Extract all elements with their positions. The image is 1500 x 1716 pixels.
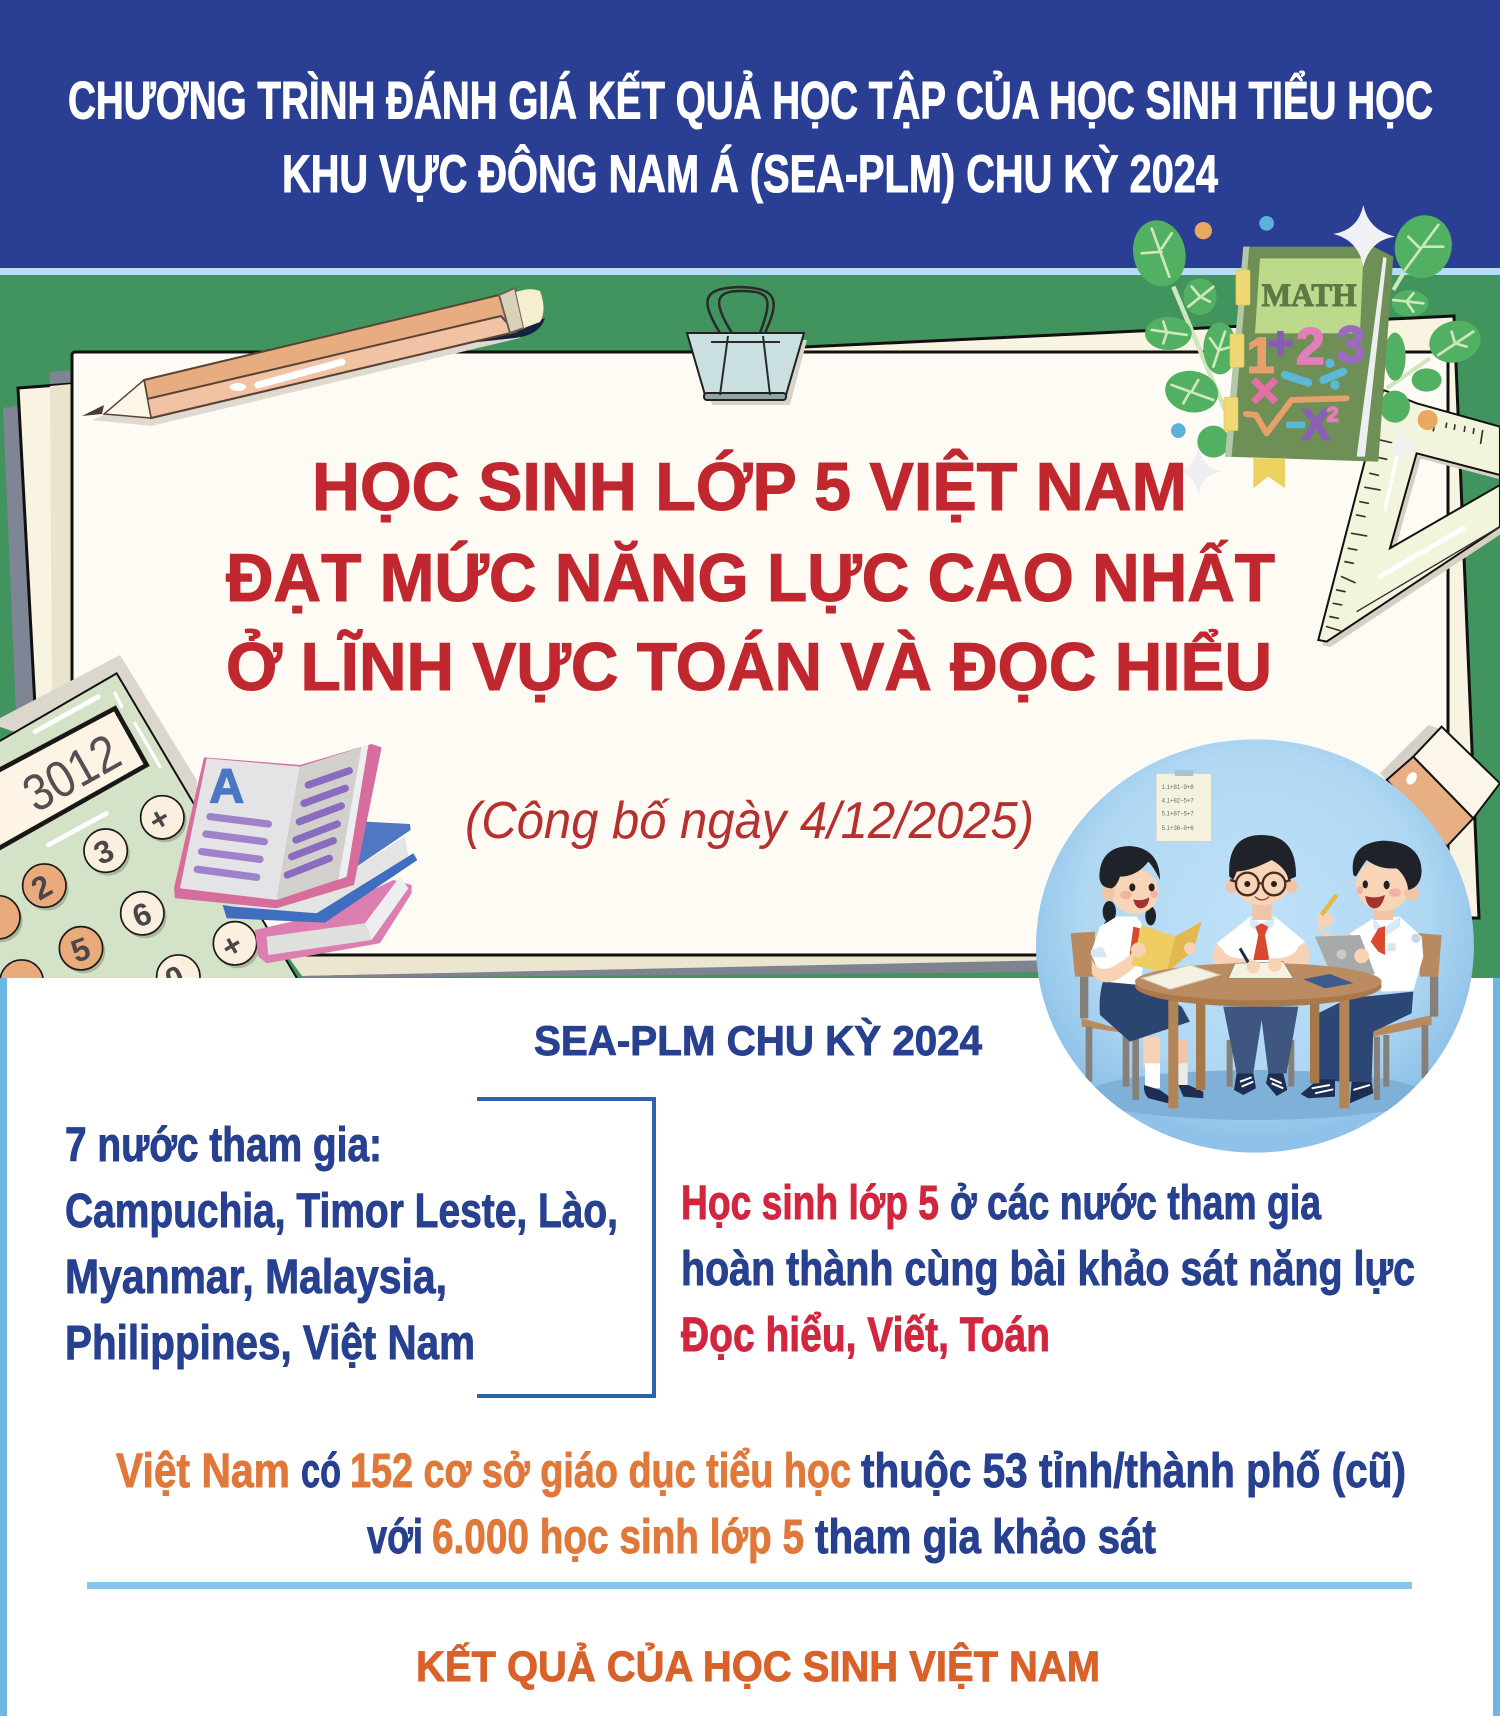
leaves — [1127, 209, 1485, 458]
survey description: Đọc hiểu, Viết, Toán — [681, 1309, 1050, 1362]
icon: math book with leaves — [1127, 205, 1485, 495]
wall poster: 5.1+87−5+7 — [1162, 812, 1194, 818]
Vietnam participation summary: Việt Nam — [116, 1445, 290, 1498]
book numerals: + — [1267, 317, 1294, 368]
books and calculator on table — [1142, 958, 1353, 989]
icon: open book — [174, 744, 382, 908]
section heading: SEA-PLM: SEA-PLM CHU KỲ 2024 — [534, 1017, 983, 1064]
book cover — [1225, 247, 1393, 462]
icon: calculator: 5 — [66, 930, 95, 970]
book label: MATH — [1262, 278, 1357, 314]
book numerals: X — [1302, 401, 1331, 449]
wall poster: 1.1+81−9+8 — [1162, 785, 1194, 791]
Vietnam participation summary: 6.000 học sinh lớp 5 — [432, 1511, 804, 1564]
title — [68, 70, 1433, 204]
main heading: Ở LĨNH VỰC TOÁN VÀ ĐỌC HIỂU — [226, 628, 1272, 705]
book numerals: 2 — [1296, 317, 1325, 375]
back paper sheets — [3, 316, 1479, 978]
section heading: results: KẾT QUẢ CỦA HỌC SINH VIỆT NAM — [416, 1642, 1100, 1691]
Vietnam participation summary: với — [367, 1511, 423, 1564]
Vietnam participation summary: thuộc 53 tỉnh/thành phố (cũ) — [861, 1445, 1406, 1498]
icon: calculator: 3 — [88, 832, 119, 872]
icon: pencil — [82, 288, 545, 426]
Vietnam participation summary: 152 cơ sở giáo dục tiểu học — [350, 1445, 851, 1498]
icon: eraser — [1380, 725, 1500, 847]
right boy — [1301, 841, 1423, 1103]
title: KHU VỰC ĐÔNG NAM Á (SEA-PLM) CHU KỲ 2024 — [282, 143, 1218, 204]
illustration: students around a table — [1036, 739, 1474, 1153]
main heading — [226, 448, 1275, 705]
round table — [1135, 963, 1382, 1108]
icon: calculator: 6 — [127, 895, 156, 935]
survey description: Học sinh lớp 5 — [681, 1177, 939, 1230]
book numerals: 2 — [1327, 402, 1339, 427]
book numerals: 3 — [1337, 316, 1365, 374]
participating countries list: 7 nước tham gia: — [65, 1119, 382, 1172]
icon: stack of books — [223, 822, 417, 963]
icon: binder clip — [687, 287, 807, 405]
survey description: ở các nước tham gia — [950, 1177, 1321, 1230]
Vietnam participation summary — [116, 1445, 1406, 1564]
wall poster: 5.1+36−9+6 — [1162, 826, 1194, 832]
header band — [0, 0, 1500, 275]
participating countries list: Campuchia, Timor Leste, Lào, — [65, 1185, 618, 1238]
icon: calculator: + — [215, 925, 249, 966]
Vietnam participation summary: có — [301, 1445, 341, 1498]
book numerals — [1247, 316, 1365, 449]
middle boy — [1212, 835, 1310, 1096]
wall poster: 4.1+82−5+7 — [1162, 798, 1194, 804]
calculator buttons — [0, 799, 259, 973]
main paper sheet — [72, 352, 1448, 955]
calculator display: 3012 — [13, 722, 130, 823]
icon: calculator: + — [142, 799, 176, 839]
dots — [1195, 222, 1212, 239]
participating countries list: Myanmar, Malaysia, — [65, 1251, 447, 1304]
icon: calculator: 0 — [160, 958, 189, 998]
survey description — [681, 1177, 1415, 1362]
participating countries list: Philippines, Việt Nam — [65, 1317, 475, 1370]
icon: calculator: 2 — [25, 867, 58, 907]
icon: calculator — [0, 655, 300, 1003]
publication date: (Công bố ngày 4/12/2025) — [465, 792, 1034, 850]
floor shadow — [1085, 1070, 1425, 1120]
participating countries list — [65, 1119, 618, 1370]
main heading: HỌC SINH LỚP 5 VIỆT NAM — [312, 448, 1187, 525]
chairs — [1071, 932, 1442, 1100]
book numerals: × — [1250, 362, 1279, 418]
Vietnam participation summary: tham gia khảo sát — [815, 1511, 1156, 1564]
bracket frame — [477, 1099, 654, 1396]
icon: set square ruler — [1318, 390, 1500, 647]
lower white panel — [0, 978, 1500, 1716]
sparkles — [1333, 205, 1395, 267]
book numerals: 1 — [1247, 328, 1274, 384]
wall poster — [1156, 770, 1212, 842]
binder tabs — [1224, 270, 1250, 431]
main heading: ĐẠT MỨC NĂNG LỰC CAO NHẤT — [226, 539, 1275, 616]
bookmark — [1253, 458, 1285, 488]
letter A: A — [209, 760, 244, 814]
green chalkboard background — [0, 275, 1500, 980]
girl — [1091, 846, 1203, 1103]
